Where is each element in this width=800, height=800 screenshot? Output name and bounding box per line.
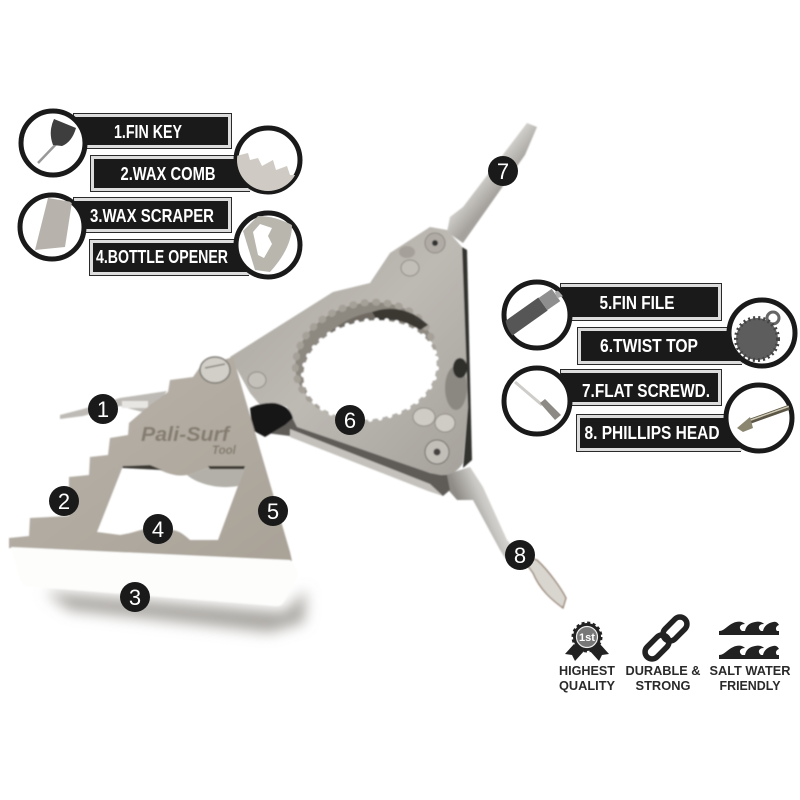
label: 7 flat screwdriver: 7.FLAT SCREWD. [582,381,710,401]
caption: SALT WATER [710,663,791,678]
label: 5 fin file: 5.FIN FILE [600,293,674,313]
label: 8 phillips head [576,385,792,452]
label: 5 fin file [504,282,722,348]
number badge 3: 3 [129,585,141,610]
blade pivot screw [200,357,230,383]
number badge 2: 2 [58,489,70,514]
label: 6 twist top: 6.TWIST TOP [600,336,698,356]
feature: salt water friendly: FRIENDLY [720,678,781,693]
shadow on bottle opener top [187,467,245,487]
number badge 5: 5 [267,499,279,524]
number badge 6: 6 [344,408,356,433]
number badge 1 [88,394,118,424]
engraved brand [141,423,237,457]
number badge 7: 7 [497,159,509,184]
label: 3 wax scraper [20,195,232,259]
icon: first place rosette: 1st [579,632,595,644]
dark cutout behind blade [250,403,293,437]
caption: HIGHEST [559,663,615,678]
label: 4 bottle opener: 4.BOTTLE OPENER [96,247,228,267]
label: 2 wax comb [90,128,300,195]
label: 1 fin key [21,111,232,175]
label: 3 wax scraper: 3.WAX SCRAPER [90,206,214,226]
number badge 5 [258,496,288,526]
feature: highest quality [559,623,615,693]
number badge 7 [488,156,518,186]
main body with twist top opening [230,227,472,475]
feature: salt water friendly [710,622,791,693]
number badge 8 [505,540,535,570]
caption: DURABLE & [626,663,700,678]
icon: chain link [642,614,690,662]
number badge 4: 4 [152,517,164,542]
number badge 8: 8 [514,543,526,568]
label: 2 wax comb: 2.WAX COMB [120,164,216,184]
label: 1 fin key: 1.FIN KEY [114,122,182,142]
illustration: multi-tool [9,123,566,632]
phillips screwdriver arm [437,467,566,608]
blade with comb steps [9,357,297,606]
icon: waves [719,622,779,659]
number badge 2 [49,486,79,516]
number badge 3 [120,582,150,612]
fin key pin [60,391,167,419]
number badge 6 [335,405,365,435]
label: 6 twist top [577,300,795,366]
blade shadow [45,590,306,632]
lower back plate [255,410,450,496]
scraper edge [11,547,297,606]
label: 4 bottle opener [89,213,300,277]
label: 8 phillips head: 8. PHILLIPS HEAD [584,423,720,443]
label: 7 flat screwdriver [504,368,722,434]
engraved brand: Pali-Surf [141,423,231,446]
engraved brand: Tool [212,445,237,457]
number badge 1: 1 [97,397,109,422]
flat screwdriver arm [447,123,537,243]
feature: highest quality: QUALITY [559,678,615,693]
feature: durable and strong [626,614,700,693]
number badge 4 [143,514,173,544]
rivets and screws [248,233,455,464]
feature: durable and strong: STRONG [636,678,690,693]
